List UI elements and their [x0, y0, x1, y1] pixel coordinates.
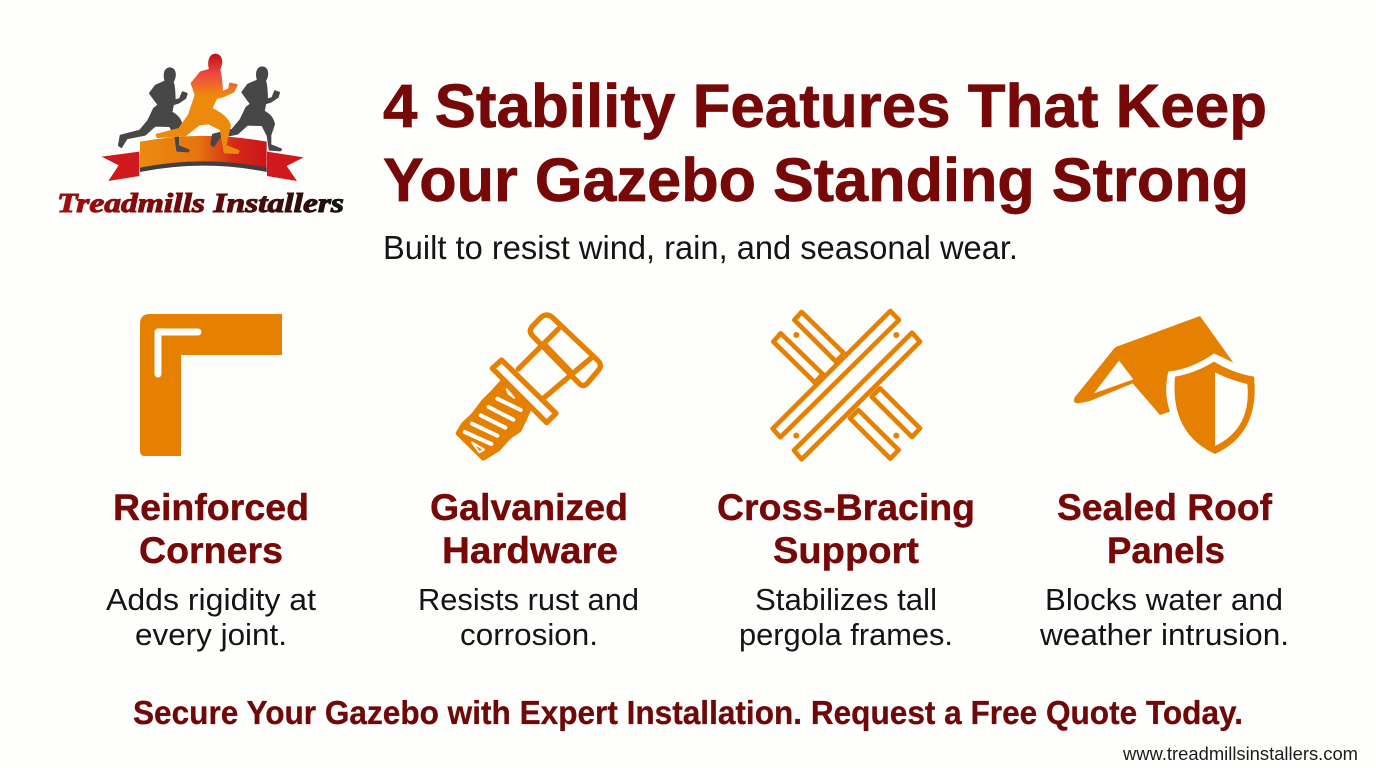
title: Your Gazebo Standing Strong [383, 146, 1249, 214]
heading: Panels [1107, 530, 1225, 571]
website url: www.treadmillsinstallers.com [1122, 744, 1358, 764]
icon: corner bracket [140, 314, 282, 456]
panel: galvanized hardware [418, 315, 639, 652]
heading [1057, 487, 1273, 571]
title [383, 72, 1267, 214]
heading: Support [773, 530, 919, 571]
description: every joint. [135, 617, 287, 652]
description: Blocks water and [1045, 582, 1283, 617]
description: Adds rigidity at [106, 582, 316, 617]
panel: cross-bracing support [717, 311, 975, 652]
heading: Cross-Bracing [717, 487, 975, 528]
panel: sealed roof panels [1039, 316, 1289, 652]
logo wordmark: Treadmills Installers [57, 188, 344, 218]
description: corrosion. [460, 617, 598, 652]
icon: crossed braces [773, 311, 920, 459]
heading: Reinforced [113, 487, 309, 528]
subtitle: Built to resist wind, rain, and seasonal wear. [383, 229, 1018, 266]
heading [430, 487, 628, 571]
runner left [119, 68, 189, 151]
banner [102, 136, 304, 181]
heading [113, 487, 309, 571]
description: pergola frames. [739, 617, 953, 652]
runner right [211, 67, 281, 150]
heading: Galvanized [430, 487, 628, 528]
description [418, 582, 639, 652]
description: Resists rust and [418, 582, 639, 617]
runners [119, 55, 281, 153]
description [739, 582, 953, 652]
description [1039, 582, 1289, 652]
icon: bolt [458, 315, 600, 458]
heading [717, 487, 975, 571]
call to action: Secure Your Gazebo with Expert Installation. Request a Free Quote Today. [133, 694, 1243, 731]
heading: Sealed Roof [1057, 487, 1273, 528]
title: 4 Stability Features That Keep [383, 72, 1267, 140]
runner centre [157, 55, 239, 153]
panel: reinforced corners [106, 314, 316, 652]
heading: Hardware [442, 530, 618, 571]
logo: Treadmills Installers [57, 55, 344, 218]
heading: Corners [139, 530, 283, 571]
description: Stabilizes tall [755, 582, 937, 617]
description [106, 582, 316, 652]
icon: roof with shield [1074, 316, 1255, 454]
description: weather intrusion. [1039, 617, 1289, 652]
